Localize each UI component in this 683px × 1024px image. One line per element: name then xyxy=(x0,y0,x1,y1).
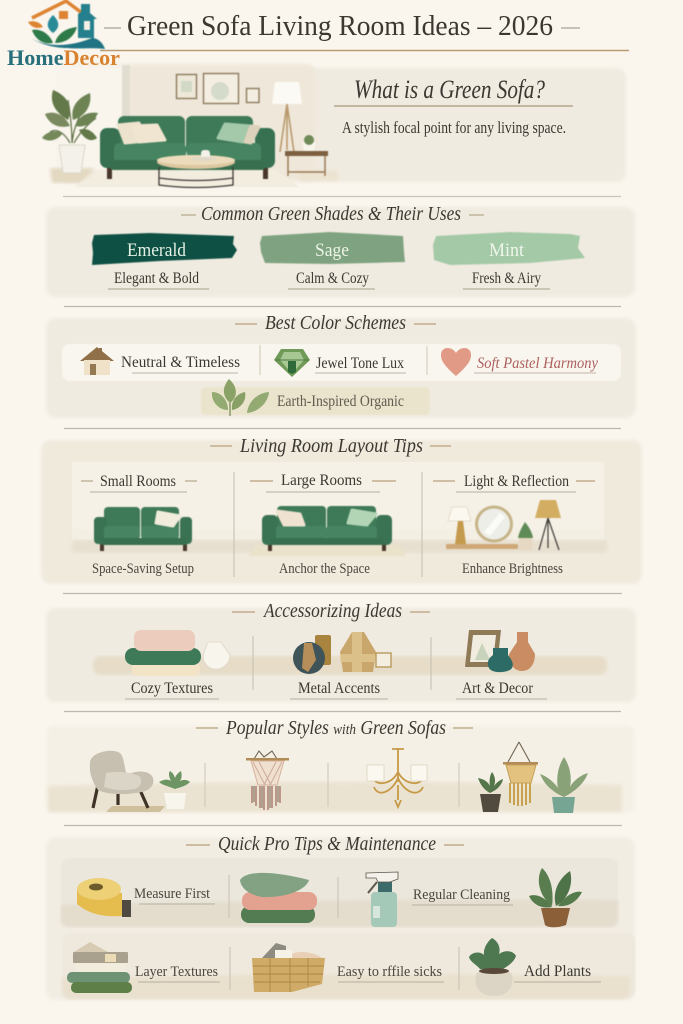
tip: measure first: Measure First xyxy=(134,886,211,902)
tip: regular cleaning xyxy=(366,872,513,927)
label: elegant and bold: Elegant & Bold xyxy=(114,270,199,287)
sofa xyxy=(107,168,112,179)
logo wordmark: HomeDecor xyxy=(7,45,120,70)
swatch: emerald xyxy=(92,233,237,265)
tip: measure first xyxy=(77,878,215,917)
column: light and reflection: Light & Reflection xyxy=(464,473,569,490)
tip: add plants: Add Plants xyxy=(524,963,591,980)
item: art and decor xyxy=(456,630,547,699)
scheme: neutral and timeless: Neutral & Timeless xyxy=(121,354,240,371)
scheme: neutral and timeless xyxy=(80,347,240,375)
icon: house xyxy=(80,347,114,375)
item: metal accents: Metal Accents xyxy=(298,680,380,697)
heading: Common Green Shades & Their Uses xyxy=(201,203,461,225)
scheme: jewel tone xyxy=(274,349,406,377)
panel: accessorizing ideas xyxy=(46,600,636,702)
label: fresh and airy: Fresh & Airy xyxy=(472,270,541,287)
icon: heart xyxy=(441,348,471,376)
icon: potted plant xyxy=(529,868,582,927)
logo xyxy=(7,1,120,70)
panel: what is a green sofa xyxy=(42,64,626,188)
title: Green Sofa Living Room Ideas – 2026 xyxy=(127,10,553,42)
panel: living room layout tips xyxy=(41,435,642,584)
swatch: mint: Mint xyxy=(489,240,525,261)
column: small rooms: Small Rooms xyxy=(100,473,176,490)
scheme: earth-inspired xyxy=(201,379,430,416)
tip: regular cleaning: Regular Cleaning xyxy=(413,887,510,903)
item: metal accents xyxy=(290,632,391,699)
tips row 1 xyxy=(61,858,618,927)
scheme: earth-inspired: Earth-Inspired Organic xyxy=(277,393,404,410)
scheme: jewel tone: Jewel Tone Lux xyxy=(316,355,404,372)
scheme: soft pastel: Soft Pastel Harmony xyxy=(477,355,599,372)
label: calm and cozy: Calm & Cozy xyxy=(296,270,369,287)
icon: leaves xyxy=(212,379,269,416)
tip: add plants xyxy=(469,938,601,996)
item: art and decor: Art & Decor xyxy=(462,680,534,697)
panel: quick pro tips xyxy=(46,833,635,1000)
tip: easy to refile xyxy=(252,943,444,992)
illustration: large sofa xyxy=(249,506,406,556)
heading: Quick Pro Tips & Maintenance xyxy=(218,833,436,855)
icon: chandelier xyxy=(367,748,427,807)
swatch: sage xyxy=(260,232,405,264)
swatch: mint xyxy=(433,232,585,265)
icon: plants and wall hanging xyxy=(478,742,588,813)
plant xyxy=(50,100,96,143)
swatch: emerald: Emerald xyxy=(127,240,186,261)
icon: macrame xyxy=(246,751,289,810)
tip: layer textures xyxy=(67,942,220,993)
icon: armchair and plant xyxy=(90,751,190,812)
heading: Popular Styles with Green Sofas xyxy=(225,717,446,739)
column: large rooms xyxy=(249,472,406,577)
tips row 2 xyxy=(62,933,635,999)
icon: stacked pillows xyxy=(240,873,317,923)
item: cozy textures xyxy=(125,630,230,699)
scheme: soft pastel xyxy=(441,348,599,376)
heading: Accessorizing Ideas xyxy=(262,600,402,622)
column: large rooms: Large Rooms xyxy=(281,472,362,489)
icon: gem xyxy=(274,349,310,377)
illustration: small sofa xyxy=(94,507,192,551)
heading: Living Room Layout Tips xyxy=(239,435,423,457)
icon: house logo xyxy=(28,1,105,49)
heading: Best Color Schemes xyxy=(265,312,406,334)
tip: layer textures: Layer Textures xyxy=(135,964,218,980)
text: definition: A stylish focal point for any living space. xyxy=(342,118,566,137)
column: small rooms xyxy=(81,473,197,577)
panel: best color schemes xyxy=(46,312,636,418)
column: large rooms: Anchor the Space xyxy=(279,561,370,577)
frames xyxy=(176,74,196,98)
illustration: living room xyxy=(42,64,338,188)
coffee table xyxy=(159,167,233,188)
column: small rooms: Space-Saving Setup xyxy=(92,561,194,577)
column: light and reflection xyxy=(433,473,595,577)
side table xyxy=(285,151,328,156)
tip: easy to refile: Easy to rffile sicks xyxy=(337,964,442,980)
item: cozy textures: Cozy Textures xyxy=(131,680,213,697)
floor lamp xyxy=(280,104,294,152)
heading: what is a green sofa: What is a Green Sofa? xyxy=(354,75,545,104)
swatch: sage: Sage xyxy=(315,240,349,261)
illustration: lamp mirror plant xyxy=(446,500,561,550)
column: light and reflection: Enhance Brightness xyxy=(462,561,563,577)
panel: common green shades xyxy=(46,203,635,297)
panel: popular styles xyxy=(46,717,635,813)
